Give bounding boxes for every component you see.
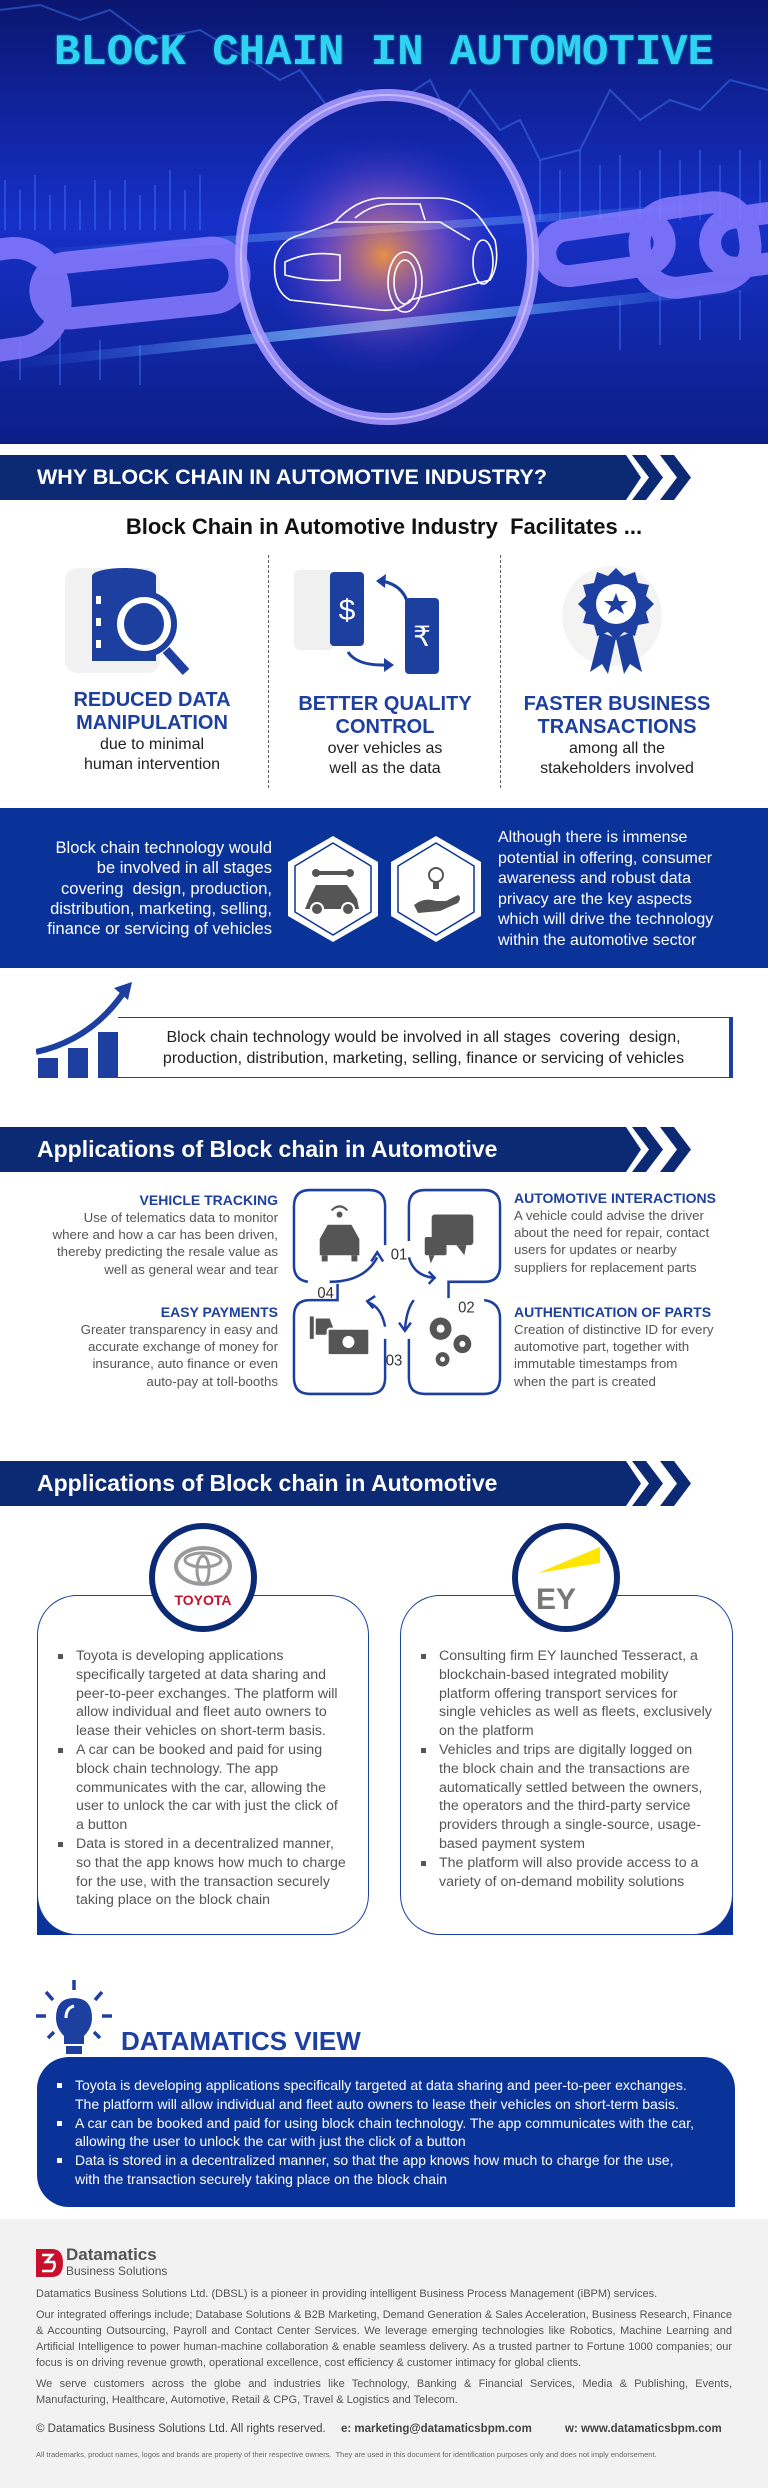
text block: authentication of parts: automotive part, together with [514, 1339, 689, 1354]
text block: left: finance or servicing of vehicles [47, 920, 272, 938]
text block: ey bullets: platform offering transport services for [439, 1686, 678, 1702]
text block: vehicle tracking: where and how a car has been driven, [53, 1227, 278, 1242]
text block: ey bullets: blockchain-based integrated mobility [439, 1667, 668, 1683]
divider lines [268, 555, 269, 788]
text block: right: potential in offering, consumer [498, 850, 712, 866]
text block: automotive interactions: AUTOMOTIVE INTERACTIONS [514, 1190, 716, 1206]
icon: award badge [562, 566, 662, 674]
text block: left: be involved in all stages [97, 859, 272, 877]
callout box: Block chain technology would be involved in all stages covering design, [166, 1029, 681, 1046]
text block: toyota bullets: Data is stored in a decentralized manner, [76, 1836, 334, 1852]
text block: toyota bullets: specifically targeted at data sharing and [76, 1667, 326, 1683]
panel: reduced data manipulation [65, 568, 231, 773]
panel: better quality control: BETTER QUALITY [298, 693, 472, 715]
subtitle: Block Chain in Automotive Industry Facilitates ... [126, 514, 642, 539]
chart: growth arrow icon [36, 982, 132, 1078]
text block: automotive interactions: A vehicle could advise the driver [514, 1208, 704, 1223]
banner: applications 1 [0, 1127, 691, 1172]
panel: ey card [400, 1595, 733, 1935]
panel: better quality control: well as the data [329, 760, 441, 777]
text block: authentication of parts: when the part is created [514, 1374, 656, 1389]
panel: faster business transactions [524, 566, 710, 777]
panel: datamatics view box [37, 2057, 735, 2207]
icon: light bulb [36, 1980, 112, 2054]
text block: automotive interactions: about the need for repair, contact [514, 1225, 709, 1240]
panel: reduced data manipulation: MANIPULATION [76, 712, 228, 734]
panel: faster business transactions: TRANSACTIONS [538, 716, 696, 738]
icon: phones exchange: $ [339, 594, 356, 627]
text block: easy payments: insurance, auto finance or even [92, 1356, 278, 1371]
text block: ey bullets: Vehicles and trips are digitally logged on [439, 1742, 692, 1758]
text block: ey bullets: Consulting firm EY launched Tesseract, a [439, 1648, 698, 1664]
text block: footer about: Our integrated offerings include; Database Solutions & B2B Marketing, Demand Generation & Sales Acceleration, Business Research, Finance & Accounting Outsourcing, Payroll and Contact Center Services. We leverage emerging technologies like Robotics, Machine Learning and Artificial Intelligence to power human-machine collaboration & enable seamless delivery. As a trusted partner to Fortune 1000 companies; our focus is on driving revenue growth, operational excellence, cost efficiency & customer intimacy for global clients. [36, 2309, 732, 2369]
chart: application cycle: 01 [391, 1246, 407, 1263]
text block: ey bullets: the operators and the third-party service [439, 1798, 691, 1814]
banner: why block chain: WHY BLOCK CHAIN IN AUTOMOTIVE INDUSTRY? [37, 465, 547, 489]
text block: automotive interactions: suppliers for replacement parts [514, 1260, 697, 1275]
text block: left: covering design, production, [61, 880, 272, 898]
text block: contact line: w: www.datamaticsbpm.com [565, 2423, 722, 2435]
panel: datamatics view box: The platform will allow individual and fleet auto owners to lease their vehicles on short-term basis. [75, 2096, 679, 2112]
panel: better quality control [294, 570, 472, 777]
text block: vehicle tracking [52, 1192, 278, 1277]
text block: right: which will drive the technology [498, 911, 713, 928]
text block: authentication of parts: immutable timestamps from [514, 1356, 677, 1371]
text block: vehicle tracking: thereby predicting the resale value as [57, 1244, 278, 1259]
text block: ey bullets [421, 1648, 712, 1890]
text block: toyota bullets: peer-to-peer exchanges. The platform will [76, 1686, 338, 1702]
text block: footer about [36, 2288, 732, 2406]
text block: easy payments: accurate exchange of money for [88, 1339, 278, 1354]
banner: applications 1: Applications of Block chain in Automotive [37, 1136, 497, 1162]
panel: datamatics view box: A car can be booked and paid for using block chain technology. The app communicates with the car, [75, 2115, 694, 2131]
text block: authentication of parts: AUTHENTICATION OF PARTS [514, 1304, 711, 1320]
text block: left [47, 839, 272, 938]
text block: easy payments [81, 1304, 278, 1389]
text block: ey bullets: single vehicles as well as fleets, exclusively [439, 1704, 712, 1720]
text block: toyota bullets: communicates with the car, allowing the [76, 1780, 326, 1796]
text block: contact line: e: marketing@datamaticsbpm.com [341, 2423, 532, 2435]
text block: right: within the automotive sector [498, 932, 696, 948]
text block: toyota bullets: lease their vehicles on short-term basis. [76, 1723, 326, 1739]
text block: easy payments: auto-pay at toll-booths [146, 1374, 278, 1389]
hero header [0, 0, 768, 444]
panel: better quality control: CONTROL [336, 716, 434, 738]
text block: right: awareness and robust data [498, 870, 691, 887]
panel: faster business transactions: stakeholders involved [540, 760, 694, 777]
text block: toyota bullets: Toyota is developing applications [76, 1648, 283, 1664]
chart: application cycle: 04 [317, 1285, 334, 1302]
text block: contact line: © Datamatics Business Solutions Ltd. All rights reserved. [36, 2423, 326, 2435]
panel: reduced data manipulation: due to minimal [100, 736, 204, 753]
text block: easy payments: EASY PAYMENTS [161, 1304, 278, 1320]
text block: footer about: We serve customers across the globe and industries like Technology, Banking & Financial Services, Media & Publishing, Events, Manufacturing, Healthcare, Automotive, Retail & CPG, Travel & Logistics and Telecom. [36, 2378, 732, 2406]
icon: datamatics logo [36, 2245, 167, 2278]
chart: application cycle: 03 [386, 1352, 402, 1369]
heading: datamatics view: DATAMATICS VIEW [121, 2026, 361, 2056]
callout box [118, 1017, 733, 1078]
text block: trademark note: All trademarks, product names, logos and brands are property of their respective owners. They are used in this document for identification purposes only and does not imply endorsement. [36, 2450, 657, 2459]
panel: datamatics view box: with the transaction securely taking place on the block chain [75, 2171, 447, 2187]
footer [0, 2219, 768, 2488]
panel: toyota card [37, 1595, 369, 1935]
text block: vehicle tracking: Use of telematics data to monitor [84, 1210, 278, 1225]
panel: better quality control: over vehicles as [328, 740, 442, 757]
chart: application cycle [292, 1188, 502, 1396]
text block: toyota bullets: allow individual and fleet auto owners to [76, 1704, 327, 1720]
text block: authentication of parts: Creation of distinctive ID for every [514, 1322, 714, 1337]
callout box: production, distribution, marketing, selling, finance or servicing of vehicles [163, 1050, 684, 1067]
text block: ey bullets: providers through a single-source, usage- [439, 1817, 701, 1833]
icon: database magnifier [65, 568, 190, 675]
icon: phones exchange [294, 570, 439, 674]
icon: toyota logo [149, 1523, 257, 1632]
text block: toyota bullets: a button [76, 1817, 127, 1833]
title: BLOCK CHAIN IN AUTOMOTIVE [54, 28, 714, 78]
panel: datamatics view box: Data is stored in a decentralized manner, so that the app knows how much to charge for the use, [75, 2152, 673, 2168]
panel: blue band [0, 808, 768, 968]
icon: ey logo: EY [536, 1583, 576, 1616]
text block: toyota bullets: so that the app knows how much to charge [76, 1855, 346, 1871]
banner: applications 2 [0, 1461, 691, 1506]
text block: contact line [36, 2423, 722, 2435]
icon: ey logo [512, 1523, 620, 1632]
text block: easy payments: Greater transparency in easy and [81, 1322, 278, 1337]
icon: datamatics logo: Business Solutions [66, 2264, 167, 2278]
text block: toyota bullets: block chain technology. The app [76, 1761, 278, 1777]
banner: why block chain [0, 455, 691, 500]
panel: reduced data manipulation: REDUCED DATA [73, 689, 231, 711]
text block: toyota bullets: taking place on the block chain [76, 1892, 270, 1908]
text block: ey bullets: on the platform [439, 1723, 534, 1739]
panel: datamatics view box: allowing the user to unlock the car with just the click of a button [75, 2133, 466, 2149]
text block: right: privacy are the key aspects [498, 890, 692, 908]
text block: authentication of parts [514, 1304, 714, 1389]
text block: automotive interactions [514, 1190, 716, 1275]
icon: hexagon bulb hand [391, 836, 481, 942]
text block: automotive interactions: users for updates or nearby [514, 1242, 677, 1257]
text block: ey bullets: variety of on-demand mobility solutions [439, 1874, 684, 1890]
text block: ey bullets: the block chain and the transactions are [439, 1761, 690, 1777]
text block: toyota bullets [58, 1648, 346, 1908]
panel: faster business transactions: among all the [569, 740, 665, 757]
icon: toyota logo: TOYOTA [174, 1592, 232, 1608]
panel: faster business transactions: FASTER BUSINESS [524, 693, 710, 715]
text block: toyota bullets: user to unlock the car with just the click of [76, 1798, 338, 1814]
text block: toyota bullets: A car can be booked and paid for using [76, 1742, 322, 1758]
icon: phones exchange: ₹ [413, 621, 431, 652]
banner: applications 2: Applications of Block chain in Automotive [37, 1470, 497, 1496]
text block: toyota bullets: for the use, with the transaction securely [76, 1874, 330, 1890]
text block: vehicle tracking: well as general wear and tear [104, 1262, 278, 1277]
text block: left: Block chain technology would [56, 839, 272, 857]
chart: application cycle: 02 [458, 1299, 475, 1316]
text block: ey bullets: based payment system [439, 1836, 585, 1852]
panel: datamatics view box: Toyota is developing applications specifically targeted at data sharing and peer-to-peer exchanges. [75, 2077, 687, 2093]
text block: ey bullets: The platform will also provide access to a [439, 1855, 698, 1871]
text block: right: Although there is immense [498, 829, 687, 846]
icon: datamatics logo: Datamatics [66, 2245, 157, 2264]
text block: right [498, 829, 714, 948]
text block: left: distribution, marketing, selling, [50, 900, 272, 918]
text block: vehicle tracking: VEHICLE TRACKING [140, 1192, 278, 1208]
text block: ey bullets: automatically settled between the owners, [439, 1780, 702, 1796]
panel: reduced data manipulation: human intervention [84, 756, 220, 773]
text block: footer about: Datamatics Business Solutions Ltd. (DBSL) is a pioneer in providing intelligent Business Process Management (iBPM) services. [36, 2288, 657, 2300]
icon: hexagon car tools [288, 836, 378, 942]
